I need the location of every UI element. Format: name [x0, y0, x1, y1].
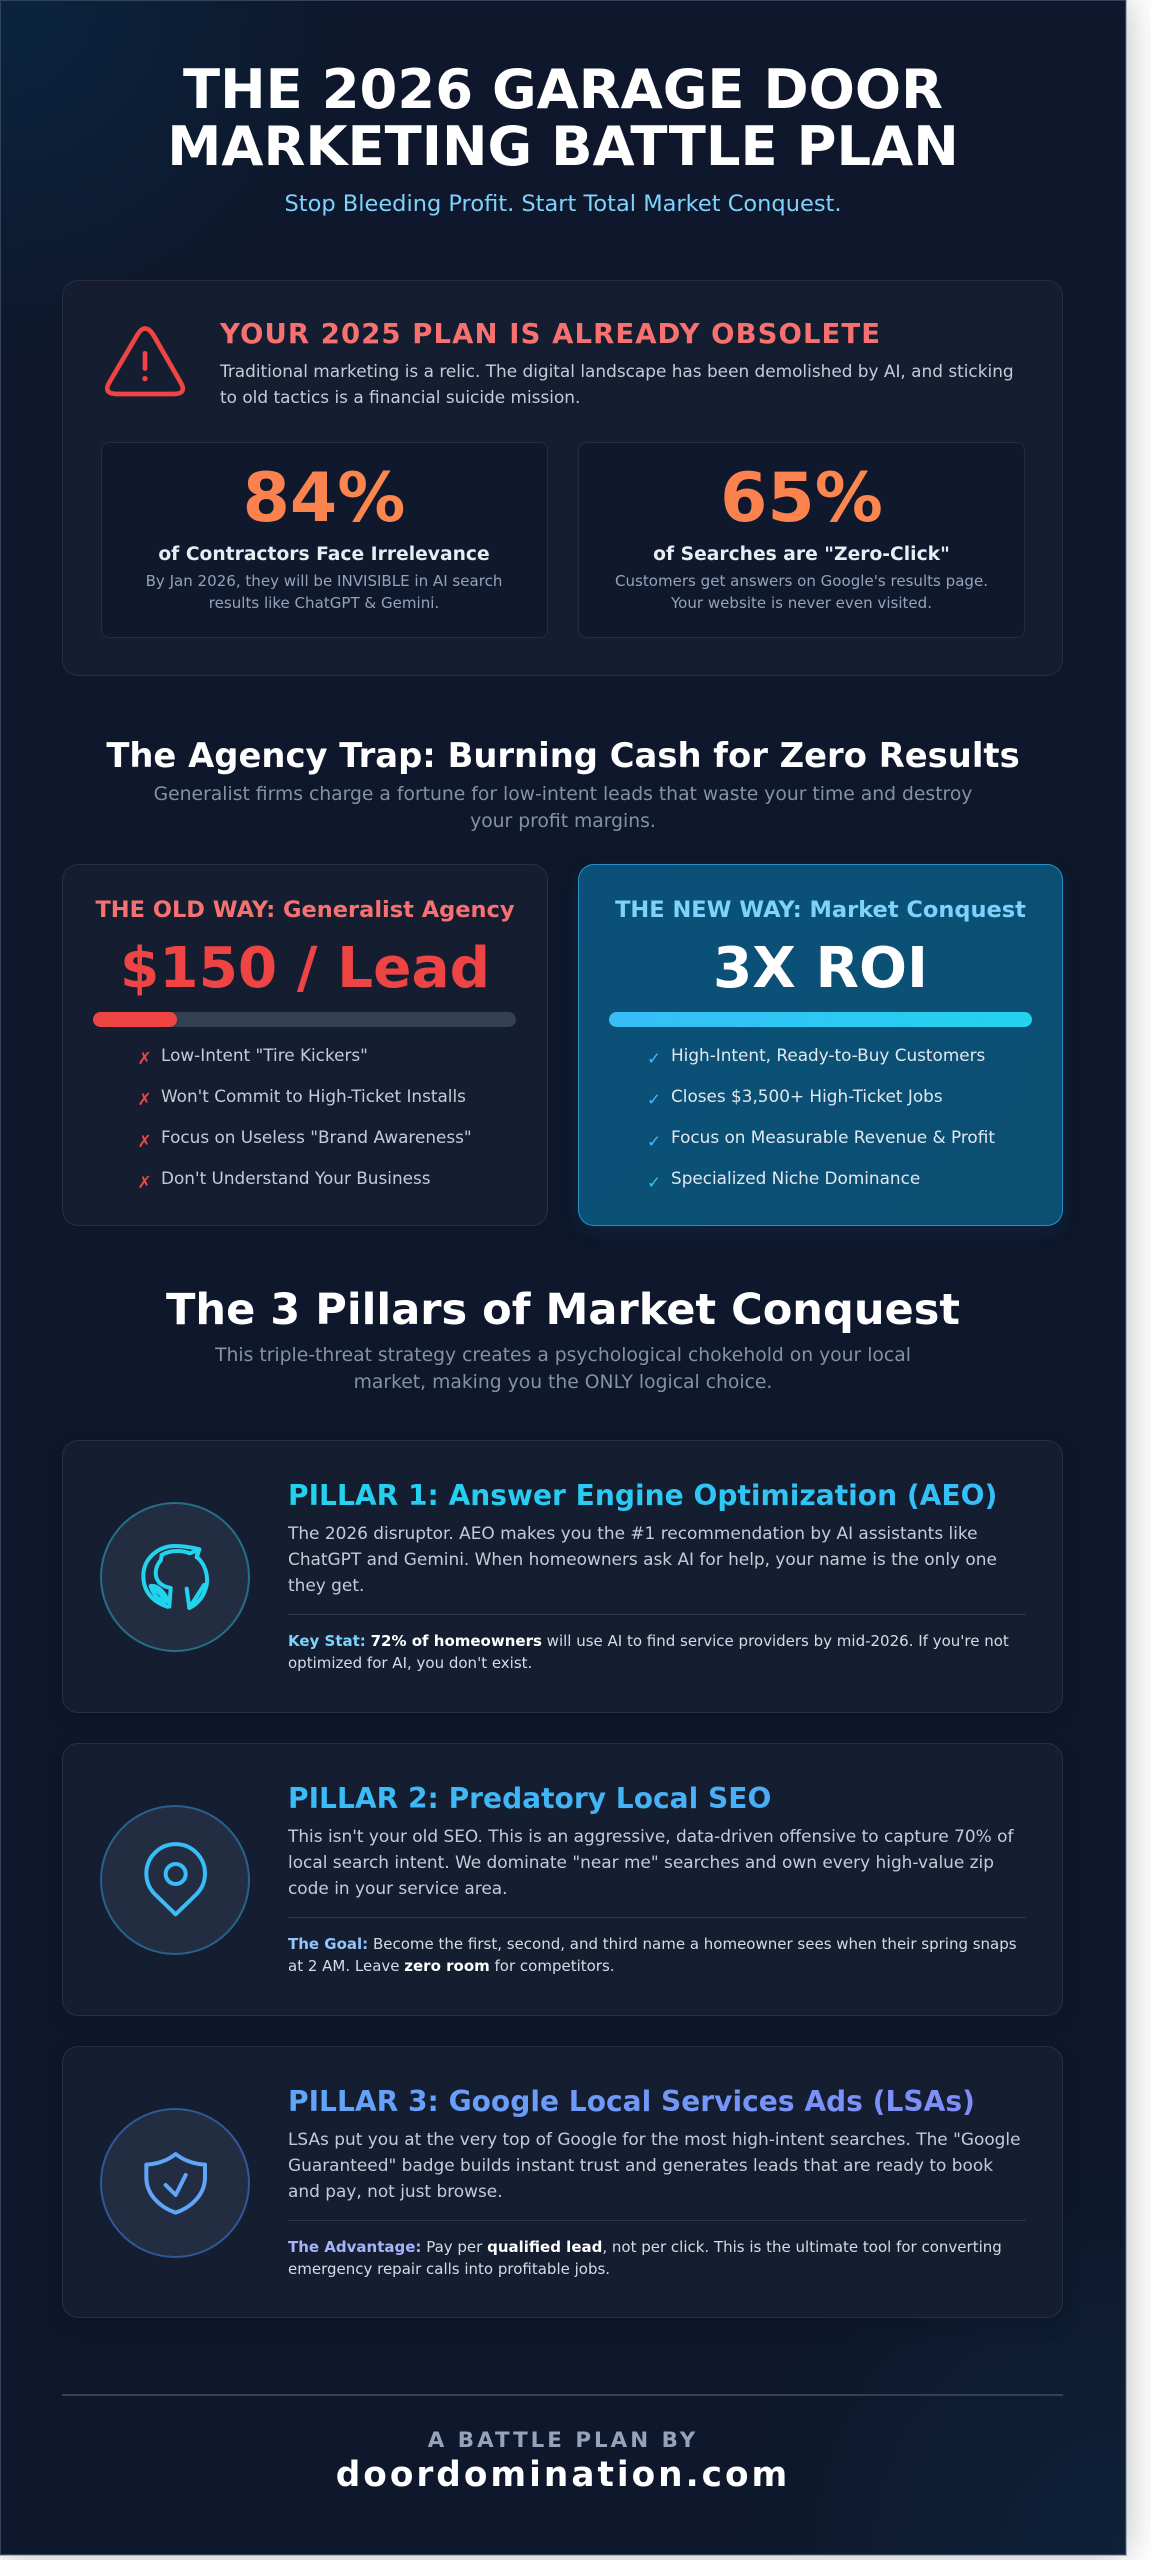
heading: agency trap: The Agency Trap: Burning Cash for Zero Results	[106, 736, 1020, 775]
pillar 3 text: and pay, not just browse.	[288, 2181, 503, 2201]
stat card: 65%	[578, 442, 1025, 638]
new way list: ✓	[647, 1048, 661, 1068]
pillar 3 text: Guaranteed" badge builds instant trust and generates leads that are ready to book	[288, 2155, 993, 2175]
stat card: 84%	[100, 442, 548, 638]
panel: pillar 2	[62, 1743, 1063, 2016]
pillar 1 text	[288, 1522, 997, 1595]
old way list: Don't Understand Your Business	[161, 1168, 431, 1188]
old way list: ✗	[138, 1172, 152, 1192]
stat description: By Jan 2026, they will be INVISIBLE in AI search	[146, 572, 502, 590]
agency trap text: Generalist firms charge a fortune for low-intent leads that waste your time and destroy	[154, 784, 972, 805]
stat label: of Searches are "Zero-Click"	[653, 544, 950, 564]
pillar 2 text: This isn't your old SEO. This is an aggressive, data-driven offensive to capture 70% of	[288, 1826, 1013, 1846]
panel: pillar 1	[62, 1440, 1063, 1713]
pillar 3 advantage: The Advantage: Pay per qualified lead, not per click. This is the ultimate tool for converting	[288, 2238, 1002, 2256]
pillar 1 text: ChatGPT and Gemini. When homeowners ask AI for help, your name is the only one	[288, 1549, 997, 1569]
title: THE 2026 GARAGE DOOR	[183, 58, 943, 120]
old way cost: $150 / Lead	[120, 936, 490, 1001]
new way list: Specialized Niche Dominance	[671, 1168, 920, 1188]
new way list: ✓	[647, 1172, 661, 1192]
pillar 1 key stat	[288, 1632, 1009, 1672]
pillar 3 text	[288, 2128, 1021, 2201]
old way list: ✗	[138, 1130, 152, 1150]
warning heading: YOUR 2025 PLAN IS ALREADY OBSOLETE	[220, 318, 881, 350]
icon: map pin in circle	[100, 1805, 250, 1955]
pillar 2 text: code in your service area.	[288, 1878, 508, 1898]
pillar 1 key stat: optimized for AI, you don't exist.	[288, 1654, 532, 1672]
old way bar	[93, 1012, 516, 1027]
agency trap text	[154, 784, 972, 832]
icon: github mark in circle	[100, 1502, 250, 1652]
panel: obsolete plan warning	[62, 280, 1063, 676]
pillar 3 advantage	[288, 2238, 1002, 2278]
old way list: Focus on Useless "Brand Awareness"	[161, 1127, 472, 1147]
pillars intro text	[215, 1345, 911, 1393]
divider	[288, 1917, 1026, 1918]
old way list: ✗	[138, 1089, 152, 1109]
new way bar	[609, 1012, 1032, 1027]
new way list	[647, 1044, 995, 1192]
title	[167, 58, 959, 178]
new way list: Focus on Measurable Revenue & Profit	[671, 1127, 995, 1147]
warning text: Traditional marketing is a relic. The digital landscape has been demolished by AI, and sticking	[220, 361, 1014, 381]
old way list: ✗	[138, 1048, 152, 1068]
new way list: ✓	[647, 1130, 661, 1150]
icon: shield check in circle	[100, 2108, 250, 2258]
divider	[288, 1614, 1026, 1615]
divider	[288, 2220, 1026, 2221]
stat description: Your website is never even visited.	[671, 594, 932, 612]
title: MARKETING BATTLE PLAN	[167, 115, 959, 178]
warning text	[220, 361, 1014, 407]
icon: warning triangle	[104, 326, 186, 396]
warning text: to old tactics is a financial suicide mission.	[220, 387, 580, 407]
new way list: Closes $3,500+ High-Ticket Jobs	[671, 1086, 943, 1106]
pillar 1 text: they get.	[288, 1575, 364, 1595]
stat label: of Contractors Face Irrelevance	[158, 544, 490, 564]
stat description	[146, 572, 502, 612]
pillar 1 text: The 2026 disruptor. AEO makes you the #1 recommendation by AI assistants like	[288, 1522, 978, 1542]
pillar 2 goal: at 2 AM. Leave zero room for competitors.	[288, 1957, 615, 1975]
stat number	[578, 465, 1025, 533]
new way heading: THE NEW WAY: Market Conquest	[615, 897, 1026, 923]
pillar 2 goal: The Goal: Become the first, second, and third name a homeowner sees when their spring snaps	[288, 1935, 1017, 1953]
pillar 3 text: LSAs put you at the very top of Google for the most high-intent searches. The "Google	[288, 2128, 1021, 2148]
pillar 1 heading: PILLAR 1: Answer Engine Optimization (AEO)	[288, 1478, 997, 1512]
pillar 3 heading: PILLAR 3: Google Local Services Ads (LSAs)	[288, 2084, 975, 2118]
stat number: 65%	[720, 459, 883, 538]
panel: old way	[62, 864, 548, 1226]
old way list: Won't Commit to High-Ticket Installs	[161, 1086, 466, 1106]
footer label: A BATTLE PLAN BY	[428, 2428, 698, 2452]
stat description: results like ChatGPT & Gemini.	[209, 594, 439, 612]
pillar 3 advantage: emergency repair calls into profitable jobs.	[288, 2260, 610, 2278]
stat description	[615, 572, 988, 612]
subtitle: Stop Bleeding Profit. Start Total Market Conquest.	[284, 191, 842, 217]
pillar 2 text	[288, 1826, 1014, 1898]
old way heading: THE OLD WAY: Generalist Agency	[95, 897, 515, 923]
footer credit	[336, 2428, 790, 2494]
pillar 1 key stat: Key Stat: 72% of homeowners will use AI to find service providers by mid-2026. If you're not	[288, 1632, 1009, 1650]
pillar 2 heading: PILLAR 2: Predatory Local SEO	[288, 1782, 771, 1814]
panel: pillar 3	[62, 2046, 1063, 2318]
old way list: Low-Intent "Tire Kickers"	[161, 1044, 368, 1064]
new way list: High-Intent, Ready-to-Buy Customers	[671, 1044, 985, 1064]
panel: new way	[578, 864, 1063, 1226]
new way list: ✓	[647, 1089, 661, 1109]
new way result: 3X ROI	[713, 936, 928, 1001]
agency trap text: your profit margins.	[470, 811, 656, 832]
pillars intro text: market, making you the ONLY logical choice.	[354, 1372, 772, 1393]
pillar 2 text: local search intent. We dominate "near me" searches and own every high-value zip	[288, 1852, 994, 1872]
old way list	[138, 1044, 472, 1192]
stat number	[100, 465, 548, 533]
stat number: 84%	[243, 459, 405, 538]
stat description: Customers get answers on Google's results page.	[615, 572, 988, 590]
heading: three pillars: The 3 Pillars of Market Conquest	[166, 1284, 960, 1334]
footer site: doordomination.com	[336, 2454, 790, 2494]
pillars intro text: This triple-threat strategy creates a psychological chokehold on your local	[215, 1345, 911, 1366]
pillar 2 goal	[288, 1935, 1017, 1975]
